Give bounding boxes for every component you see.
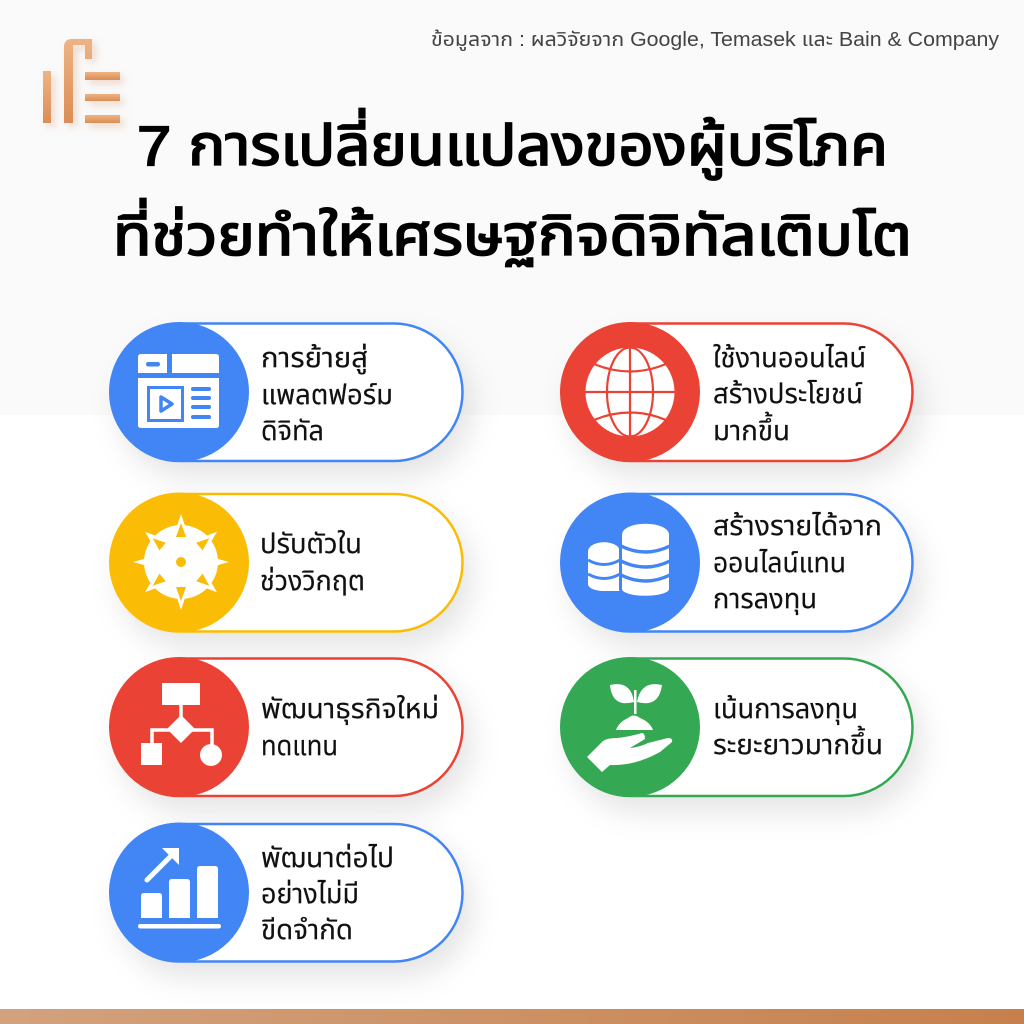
label text: การลงทุน (713, 583, 817, 615)
source note: ข้อมูลจาก : ผลวิจัยจาก Google, Temasek และ Bain & Company (431, 28, 999, 52)
label text: ทดแทน (261, 730, 338, 761)
label text: ใช้งานออนไลน์ (713, 342, 866, 373)
label text: อย่างไม่มี (261, 878, 359, 909)
label text (261, 842, 394, 945)
label text: ออนไลน์แทน (713, 547, 846, 578)
label text: เน้นการลงทุน (713, 693, 858, 725)
icon: hand holding sprout (587, 684, 672, 772)
label text (261, 342, 393, 446)
icon: rising bar chart (138, 848, 221, 928)
title: 7 การเปลี่ยนแปลงของผู้บริโภค (137, 108, 888, 180)
panel: online use creates more benefit (560, 322, 912, 462)
title (113, 108, 912, 267)
panel: adapting in crisis (109, 492, 462, 632)
panel: digital platform migration (109, 322, 462, 462)
icon: browser window with video (138, 354, 219, 428)
panel: new business development (109, 657, 462, 797)
label text: พัฒนาธุรกิจใหม่ (261, 693, 439, 725)
label text: ขีดจำกัด (261, 914, 353, 945)
label text: สร้างรายได้จาก (713, 510, 882, 541)
label text: ระยะยาวมากขึ้น (713, 725, 883, 760)
panel: long-term investment focus (560, 657, 912, 797)
bottom bar (0, 1009, 1024, 1024)
label text: แพลตฟอร์ม (261, 379, 393, 410)
label text: ปรับตัวใน (260, 528, 362, 559)
label text: พัฒนาต่อไป (261, 842, 394, 873)
icon: globe (585, 347, 675, 437)
label text (260, 528, 365, 596)
panel: unlimited development (109, 822, 462, 962)
label text: มากขึ้น (713, 411, 790, 446)
label text (713, 693, 883, 760)
icon: coin stacks (588, 522, 670, 597)
top background band (0, 0, 1024, 415)
label text: ช่วงวิกฤต (260, 565, 365, 596)
icon: flowchart (141, 683, 222, 766)
label text: การย้ายสู่ (261, 342, 368, 375)
icon: spiked virus (133, 514, 229, 610)
logo (43, 39, 120, 123)
label text (713, 342, 866, 446)
label text (261, 693, 439, 761)
panel: online income instead of investment (560, 492, 912, 632)
title: ที่ช่วยทำให้เศรษฐกิจดิจิทัลเติบโต (113, 198, 912, 267)
label text: ดิจิทัล (261, 415, 324, 446)
label text (713, 510, 882, 615)
label text: สร้างประโยชน์ (713, 378, 863, 409)
